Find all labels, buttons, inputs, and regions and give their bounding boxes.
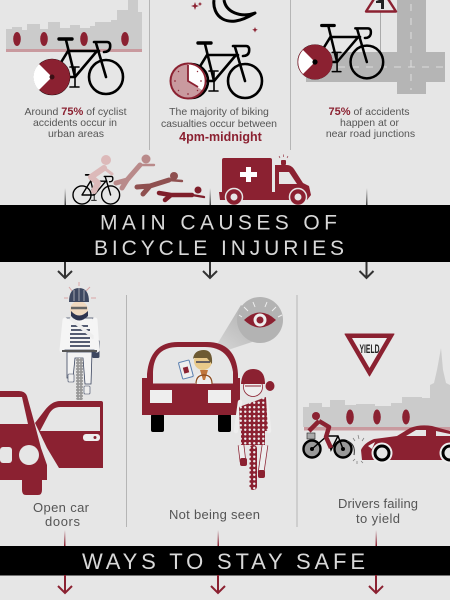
caption: accidents occur in bbox=[33, 117, 117, 129]
arrows: causes bbox=[58, 262, 374, 278]
dividers bbox=[126, 295, 127, 527]
caption: doors bbox=[45, 514, 80, 529]
caption: to yield bbox=[356, 511, 400, 526]
impact marks bbox=[353, 435, 364, 464]
panel: failing to yield bbox=[303, 334, 450, 526]
bag bbox=[92, 340, 100, 358]
wheel bbox=[250, 445, 257, 490]
bicycle bbox=[174, 43, 262, 98]
head rays bbox=[64, 282, 96, 298]
arrow stubs above banner bbox=[64, 188, 368, 205]
road markings bbox=[310, 4, 445, 90]
car with open door bbox=[0, 391, 103, 495]
panel: not being seen bbox=[142, 297, 283, 522]
caption: happen at or bbox=[340, 117, 399, 129]
rider bbox=[91, 155, 112, 191]
arms bbox=[62, 320, 97, 350]
caption bbox=[24, 106, 127, 140]
small cyclist bbox=[304, 412, 354, 458]
street line bbox=[304, 427, 450, 430]
pie chart 75% bbox=[298, 44, 332, 80]
eye bubble bbox=[237, 297, 283, 343]
bicycle bbox=[35, 39, 123, 94]
heading: BICYCLE INJURIES bbox=[94, 237, 344, 260]
falling figure 3 bbox=[159, 186, 204, 200]
red sports car bbox=[361, 425, 450, 464]
panel: 4pm-midnight bbox=[161, 0, 277, 144]
red car front bbox=[142, 342, 240, 432]
small bicycle bbox=[73, 175, 120, 204]
clock bbox=[170, 62, 206, 100]
panel: open car doors bbox=[0, 282, 103, 529]
legs bbox=[241, 445, 265, 473]
wheel bbox=[76, 358, 83, 400]
divider bbox=[149, 0, 150, 150]
panel: urban accidents bbox=[6, 0, 142, 140]
caption: 75% of accidents bbox=[329, 106, 409, 118]
caption bbox=[326, 106, 415, 140]
cyclist with beard bbox=[62, 282, 100, 400]
head bbox=[244, 378, 262, 396]
arms bbox=[236, 400, 269, 431]
caption: Around 75% of cyclist bbox=[24, 106, 127, 118]
caption: Open car bbox=[33, 500, 90, 515]
trees bbox=[346, 410, 410, 424]
top bbox=[239, 397, 268, 431]
falling figure 2 bbox=[137, 172, 182, 194]
legs bbox=[67, 352, 92, 384]
skirt bbox=[241, 431, 265, 445]
caption: near road junctions bbox=[326, 128, 415, 140]
driver with phone bbox=[178, 350, 212, 384]
head bbox=[70, 301, 88, 319]
torso striped bbox=[63, 318, 96, 350]
girl cyclist bbox=[236, 369, 274, 490]
stars bbox=[191, 2, 258, 33]
sight cone bbox=[210, 305, 276, 356]
trees bbox=[13, 32, 129, 46]
caption bbox=[33, 500, 90, 529]
skyline bbox=[6, 0, 142, 49]
highlight 4pm-midnight: 4pm-midnight bbox=[179, 130, 263, 144]
arrow stubs above second banner bbox=[64, 530, 377, 546]
banner: main causes bbox=[0, 205, 450, 262]
helmet bbox=[241, 369, 265, 384]
moon bbox=[214, 0, 255, 21]
handlebar bbox=[62, 350, 97, 352]
caption: Not being seen bbox=[169, 507, 260, 522]
divider bbox=[290, 0, 291, 150]
heading: MAIN CAUSES OF bbox=[100, 212, 337, 234]
road junction bbox=[306, 0, 445, 94]
caption bbox=[338, 496, 418, 526]
caption: casualties occur between bbox=[161, 118, 277, 130]
heading: WAYS TO STAY SAFE bbox=[82, 549, 365, 574]
falling figure 1 bbox=[116, 154, 154, 188]
banner: ways to stay safe bbox=[0, 546, 450, 576]
caption: The majority of biking bbox=[169, 106, 269, 118]
arrows: safety bbox=[58, 575, 383, 593]
caption: urban areas bbox=[48, 128, 104, 140]
warning sign bbox=[366, 0, 396, 52]
skyline bbox=[303, 348, 450, 427]
caption: Drivers failing bbox=[338, 496, 418, 511]
helmet bbox=[69, 288, 89, 302]
ponytail bbox=[266, 381, 274, 391]
icon: falling cyclist sequence bbox=[73, 154, 204, 204]
street line bbox=[6, 49, 142, 52]
phone bbox=[178, 360, 193, 379]
yield sign: YIELD bbox=[360, 344, 380, 356]
icon: ambulance bbox=[219, 154, 311, 206]
caption bbox=[161, 106, 277, 130]
yield sign bbox=[345, 334, 394, 376]
glasses bbox=[71, 307, 87, 309]
pie chart 75% bbox=[33, 59, 70, 95]
panel: road junctions bbox=[298, 0, 445, 140]
bicycle bbox=[299, 26, 383, 78]
